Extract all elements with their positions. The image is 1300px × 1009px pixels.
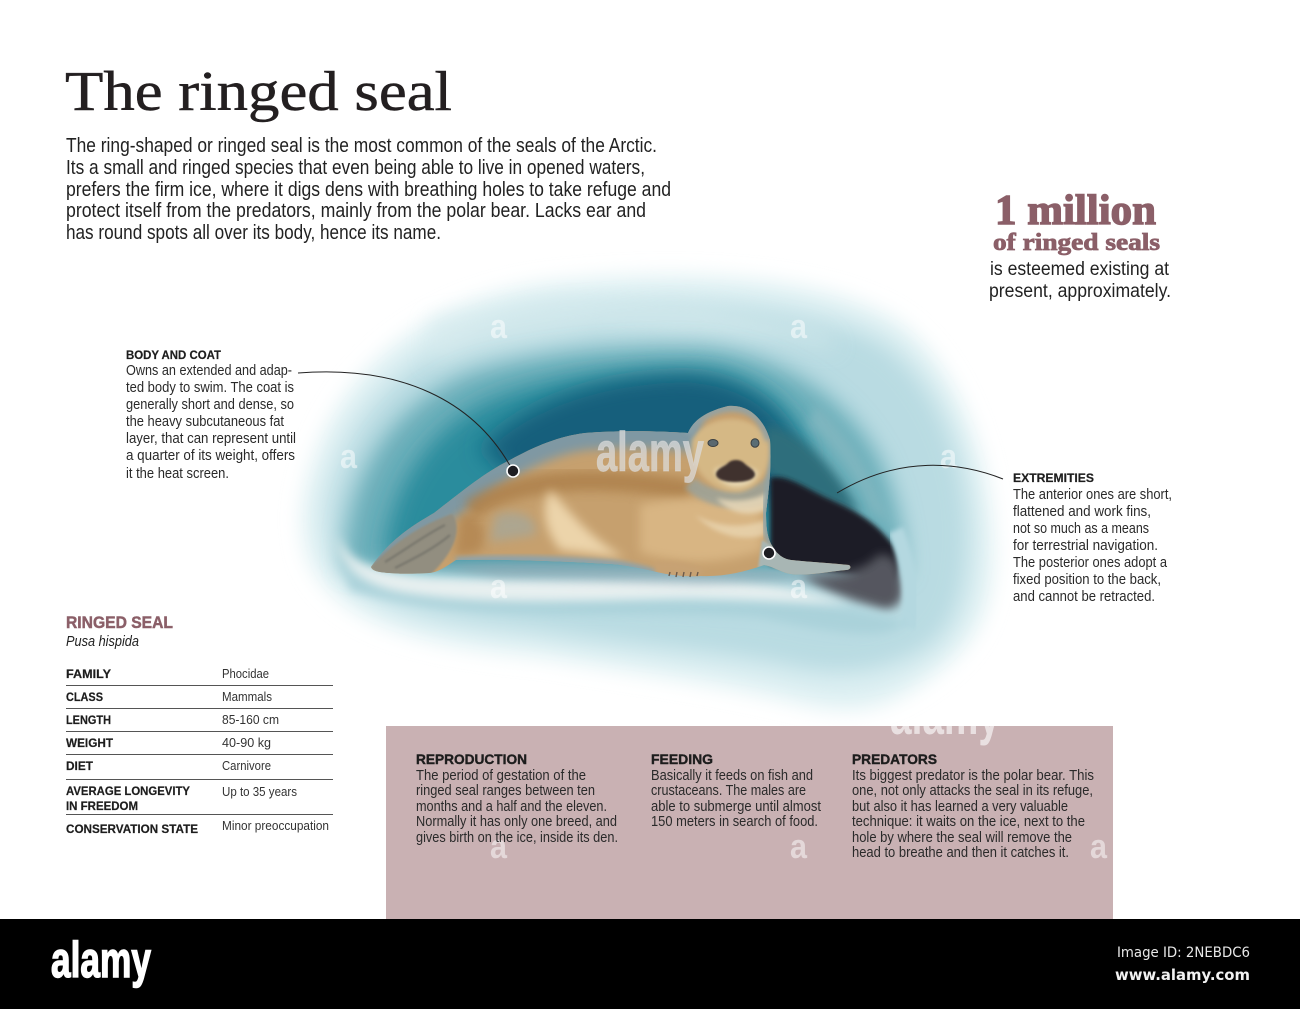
seal: claws (669, 572, 698, 577)
table heading: RINGED SEAL (66, 613, 173, 632)
table rows (66, 667, 333, 836)
text block: body and coat: generally short and dense, so (126, 396, 294, 413)
column: reproduction (416, 751, 618, 846)
text block: extremities: EXTREMITIES (1013, 471, 1094, 485)
table rows: Up to 35 years (222, 785, 297, 799)
seal: fore flipper (758, 540, 852, 578)
column: feeding: 150 meters in search of food. (651, 813, 818, 830)
watermarks: alamy (596, 420, 704, 483)
seal body (360, 400, 860, 580)
panel watermarks (490, 726, 1108, 858)
statistic: 1 million: 1 million (995, 188, 1156, 234)
column: reproduction: gives birth on the ice, inside its den. (416, 829, 618, 846)
intro text: has round spots all over its body, hence its name. (66, 222, 441, 244)
text block: extremities: for terrestrial navigation. (1013, 537, 1158, 554)
column: reproduction: Normally it has only one breed, and (416, 813, 617, 830)
watermarks: a (790, 568, 808, 606)
column: predators: head to breathe and then it catches it. (852, 844, 1069, 861)
intro text (66, 135, 671, 244)
seal: eye right (751, 439, 759, 447)
species fact table (66, 613, 333, 836)
text block: body and coat (126, 348, 296, 482)
seal: neck folds (685, 474, 770, 508)
watermarks: a (940, 438, 958, 476)
seal: muzzle (716, 460, 755, 482)
seal: light belly highlights (545, 490, 625, 558)
title: The ringed seal (65, 61, 452, 123)
column: predators: technique: it waits on the ice, next to the (852, 813, 1085, 830)
column: reproduction: ringed seal ranges between ten (416, 782, 595, 799)
column: reproduction: The period of gestation of the (416, 767, 586, 784)
column: predators (852, 751, 1094, 861)
illustration: ice den with seal (303, 277, 992, 708)
seal: right neck edge (766, 440, 773, 547)
seal: grey-blue back rim (371, 431, 700, 567)
column: predators: but also it has learned a very valuable (852, 798, 1068, 815)
ice: dark recess (770, 477, 910, 628)
table heading (66, 613, 173, 650)
intro text: Its a small and ringed species that even being able to live in opened waters, (66, 157, 645, 179)
table rows: AVERAGE LONGEVITY (66, 784, 190, 798)
table rows: Phocidae (222, 667, 269, 681)
column: feeding: FEEDING (651, 751, 713, 767)
text block: body and coat: the heavy subcutaneous fat (126, 413, 285, 430)
column: predators: PREDATORS (852, 751, 937, 767)
text block: extremities: flattened and work fins, (1013, 503, 1151, 520)
footer bar (0, 919, 1300, 1009)
text block: extremities (1013, 471, 1172, 605)
table rows: FAMILY (66, 667, 111, 681)
statistic: 1 million: is esteemed existing at (990, 259, 1170, 280)
text block: body and coat: BODY AND COAT (126, 348, 222, 362)
callout line: extremities (763, 465, 1003, 559)
table rows: CLASS (66, 690, 103, 704)
ice: snow floor (338, 535, 905, 634)
seal: bottom shadow (456, 560, 657, 574)
table rows: IN FREEDOM (66, 799, 138, 813)
watermarks: a (490, 568, 508, 606)
text block: body and coat: it the heat screen. (126, 465, 229, 482)
ice: outer blurred snow mass (303, 277, 992, 708)
statistic: 1 million: present, approximately. (989, 281, 1171, 302)
statistic: 1 million: of ringed seals (993, 230, 1160, 256)
intro text: The ring-shaped or ringed seal is the most common of the seals of the Arctic. (66, 135, 657, 157)
seal: eye left (708, 440, 718, 446)
footer image id: www.alamy.com (1115, 966, 1250, 984)
text block: body and coat: Owns an extended and adap- (126, 362, 292, 379)
footer image id: Image ID: 2NEBDC6 (1117, 945, 1250, 961)
panel watermarks: alamy (890, 683, 1000, 746)
table rows: LENGTH (66, 713, 111, 727)
text block: body and coat: layer, that can represent until (126, 430, 296, 447)
column: feeding: crustaceans. The males are (651, 782, 806, 799)
table rows: Mammals (222, 690, 272, 704)
text block: extremities: The posterior ones adopt a (1013, 554, 1168, 571)
table heading: Pusa hispida (66, 633, 139, 650)
text block: extremities: The anterior ones are short, (1013, 486, 1172, 503)
table rows: Minor preoccupation (222, 819, 329, 833)
footer logo: alamy (51, 932, 151, 988)
text block: extremities: fixed position to the back, (1013, 571, 1161, 588)
footer image id (1115, 945, 1250, 984)
panel watermarks: a (790, 828, 808, 866)
column: predators: hole by where the seal will remove the (852, 829, 1072, 846)
panel watermarks: a (1090, 828, 1108, 866)
table rows: CONSERVATION STATE (66, 822, 198, 836)
text block: body and coat: a quarter of its weight, offers (126, 447, 295, 464)
column: reproduction: months and a half and the eleven. (416, 798, 607, 815)
seal: rear flipper (371, 514, 457, 576)
intro text: protect itself from the predators, mainly from the polar bear. Lacks ear and (66, 200, 646, 222)
column: feeding (651, 751, 822, 830)
table rows: 40-90 kg (222, 736, 271, 750)
watermarks: a (490, 308, 508, 346)
watermarks: a (790, 308, 808, 346)
statistic: 1 million (989, 188, 1171, 302)
table rows: WEIGHT (66, 736, 114, 750)
table rows: 85-160 cm (222, 713, 279, 727)
column: predators: one, not only attacks the seal in its refuge, (852, 782, 1093, 799)
table rows: DIET (66, 759, 94, 773)
column: predators: Its biggest predator is the polar bear. This (852, 767, 1094, 784)
intro text: prefers the firm ice, where it digs dens with breathing holes to take refuge and (66, 179, 671, 201)
table rows: Carnivore (222, 759, 271, 773)
text block: body and coat: ted body to swim. The coat is (126, 379, 294, 396)
seal: brown back shading (470, 481, 690, 510)
column: feeding: able to submerge until almost (651, 798, 822, 815)
ice: cave interior (345, 347, 905, 575)
column: reproduction: REPRODUCTION (416, 751, 527, 767)
panel watermarks: a (490, 828, 508, 866)
seal: paw (653, 568, 697, 576)
watermarks: a (340, 438, 358, 476)
column: feeding: Basically it feeds on fish and (651, 767, 813, 784)
watermarks (340, 308, 958, 606)
text block: extremities: and cannot be retracted. (1013, 588, 1155, 605)
seal: head (692, 419, 769, 492)
callout line: body and coat (298, 372, 519, 477)
text block: extremities: not so much as a means (1013, 520, 1149, 537)
panel: reproduction, feeding, predators (386, 726, 1113, 919)
